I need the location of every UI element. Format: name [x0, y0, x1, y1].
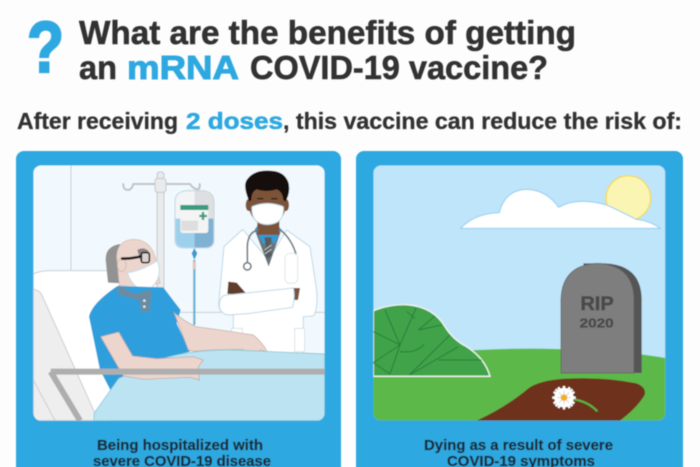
grass: [373, 349, 665, 421]
panel background: [356, 151, 683, 467]
IV stand: [123, 172, 200, 292]
tombstone: 2020: [580, 315, 614, 330]
cloud: [461, 189, 660, 228]
title: an: [79, 50, 117, 87]
room wall: [33, 165, 325, 421]
panel: death: [356, 151, 683, 467]
subtitle: , this vaccine can reduce the risk of:: [283, 108, 682, 134]
flower: [552, 386, 597, 411]
panel background: [16, 151, 341, 467]
caption: Dying as a result of severe: [424, 438, 613, 454]
title: [79, 15, 576, 87]
IV bag: [175, 191, 214, 325]
dirt mound: [477, 378, 645, 421]
title: COVID-19 vaccine?: [250, 50, 548, 87]
header: [17, 8, 682, 134]
subtitle: [17, 108, 682, 134]
title: mRNA: [127, 50, 239, 87]
subtitle: 2 doses: [186, 108, 283, 134]
tombstone: RIP: [580, 294, 614, 315]
title: What are the benefits of getting: [79, 15, 576, 52]
caption: [424, 438, 613, 467]
tombstone: [561, 263, 642, 373]
caption: Being hospitalized with: [97, 438, 263, 454]
caption: [93, 438, 271, 467]
bed rail: [51, 372, 325, 421]
panel: hospitalization: [16, 151, 341, 467]
patient: [89, 239, 267, 391]
subtitle: After receiving: [17, 108, 178, 134]
hospital bed: [33, 271, 120, 421]
illustration: patient and doctor: [33, 165, 325, 421]
illustration: graveyard: [373, 165, 665, 421]
doctor: [219, 171, 317, 353]
blanket: [94, 350, 325, 421]
bush: [373, 305, 490, 376]
patient forearm and hand: [101, 332, 203, 380]
sky: [373, 165, 665, 421]
icon: question mark: ?: [27, 8, 64, 88]
sun: [606, 176, 651, 220]
